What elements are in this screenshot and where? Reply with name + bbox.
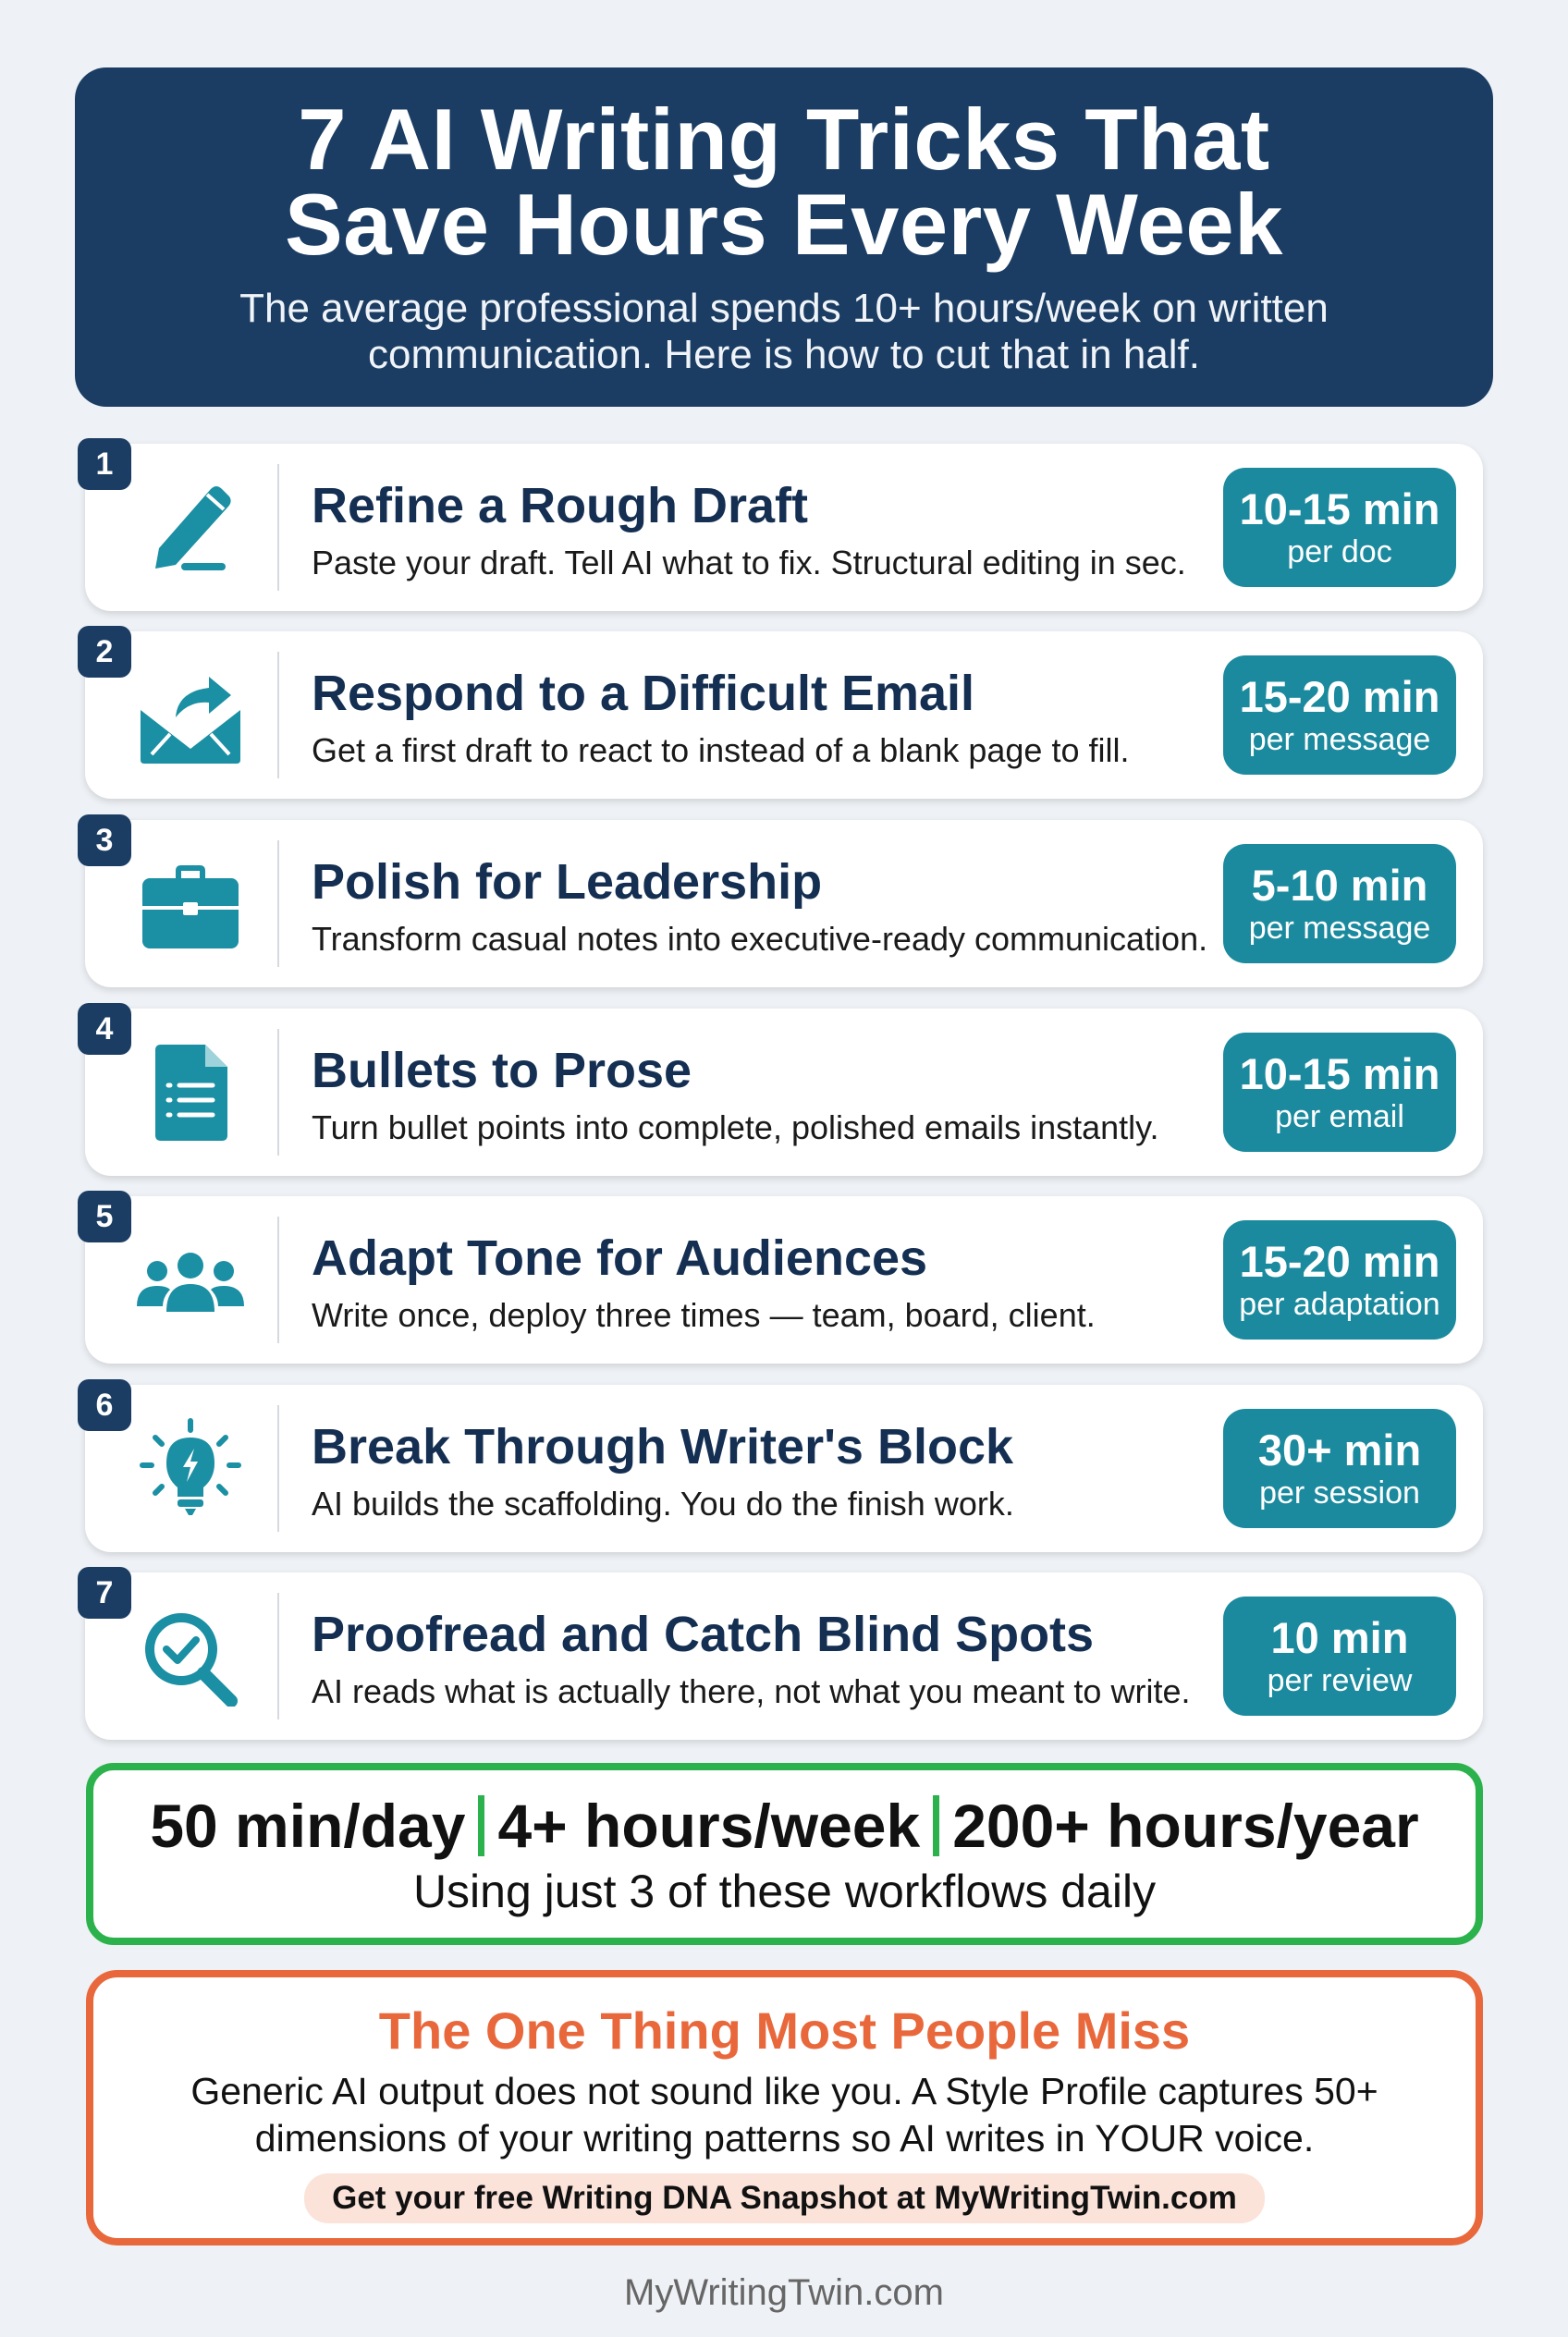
icon: envelope <box>141 677 240 764</box>
pill: time saved <box>1223 1033 1456 1152</box>
callout: one thing people miss: Generic AI output does not sound like you. A Style Profile captures 50+ <box>190 2070 1378 2112</box>
pill: time saved <box>1223 1597 1456 1716</box>
callout: one thing people miss: dimensions of your writing patterns so AI writes in YOUR voice. <box>255 2117 1314 2160</box>
callout: one thing people miss: The One Thing Most People Miss <box>379 2001 1190 2060</box>
pill: time saved <box>1223 655 1456 775</box>
card 2: difficult email: 2 <box>96 634 113 669</box>
icon: lightbulb <box>140 1418 241 1515</box>
card 6: writer's block: 6 <box>96 1388 113 1423</box>
card 5: adapt tone <box>85 1196 1483 1364</box>
pill: time saved: per adaptation <box>1239 1287 1440 1322</box>
icon: people <box>137 1253 244 1312</box>
card 1: refine draft: Paste your draft. Tell AI what to fix. Structural editing in sec. <box>312 544 1186 581</box>
pill: time saved: 15-20 min <box>1240 672 1439 721</box>
card 7: proofread: Proofread and Catch Blind Spots <box>312 1607 1094 1662</box>
pill: time saved: 5-10 min <box>1252 861 1427 910</box>
header: communication. Here is how to cut that in half. <box>368 332 1200 377</box>
pill: time saved: per review <box>1268 1663 1412 1698</box>
stats summary box: 50 min/day 4+ hours/week 200+ hours/year <box>150 1792 1419 1860</box>
header: 7 AI Writing Tricks That <box>298 91 1270 188</box>
icon: briefcase <box>142 865 239 948</box>
card 3: leadership: 3 <box>96 823 113 858</box>
card 2: difficult email: Get a first draft to react to instead of a blank page to fill. <box>312 731 1129 769</box>
pill: time saved <box>1223 1220 1456 1340</box>
icon: pencil <box>155 486 231 570</box>
header <box>75 67 1493 407</box>
pill: time saved: 30+ min <box>1258 1425 1421 1474</box>
card 7: proofread: 7 <box>96 1575 113 1610</box>
header: Save Hours Every Week <box>285 176 1283 273</box>
pill: time saved <box>1223 1409 1456 1528</box>
icon: magnifier check <box>145 1613 238 1707</box>
callout: one thing people miss: Get your free Writing DNA Snapshot at MyWritingTwin.com <box>332 2180 1237 2216</box>
pill: time saved: 10 min <box>1271 1613 1408 1662</box>
card 6: writer's block <box>85 1385 1483 1552</box>
card 3: leadership <box>85 820 1483 987</box>
card 7: proofread: AI reads what is actually there, not what you meant to write. <box>312 1672 1190 1710</box>
card 7: proofread <box>85 1572 1483 1740</box>
pill: time saved: per message <box>1249 722 1430 757</box>
card 1: refine draft: Refine a Rough Draft <box>312 478 808 533</box>
pill: time saved: 10-15 min <box>1240 484 1439 533</box>
pill: time saved <box>1223 468 1456 587</box>
card 4: bullets to prose: Bullets to Prose <box>312 1043 692 1098</box>
callout: one thing people miss <box>86 1970 1483 2245</box>
card 4: bullets to prose <box>85 1009 1483 1176</box>
card 4: bullets to prose: Turn bullet points into complete, polished emails instantly. <box>312 1108 1158 1146</box>
pill: time saved: per session <box>1259 1475 1420 1511</box>
card 2: difficult email <box>85 631 1483 799</box>
card 2: difficult email: Respond to a Difficult Email <box>312 666 974 721</box>
card 1: refine draft: 1 <box>96 447 113 482</box>
card 5: adapt tone: Adapt Tone for Audiences <box>312 1230 927 1286</box>
card 6: writer's block: AI builds the scaffolding. You do the finish work. <box>312 1485 1014 1523</box>
card 5: adapt tone: Write once, deploy three times — team, board, client. <box>312 1296 1096 1334</box>
card 4: bullets to prose: 4 <box>96 1011 113 1046</box>
icon: document <box>155 1045 227 1141</box>
pill: time saved: 15-20 min <box>1240 1237 1439 1286</box>
stats summary box <box>86 1763 1483 1945</box>
pill: time saved: per doc <box>1287 534 1392 569</box>
card 1: refine draft <box>85 444 1483 611</box>
footer: MyWritingTwin.com <box>624 2272 944 2313</box>
pill: time saved: 10-15 min <box>1240 1049 1439 1098</box>
pill: time saved: per email <box>1275 1099 1404 1134</box>
card 5: adapt tone: 5 <box>96 1199 113 1234</box>
pill: time saved: per message <box>1249 911 1430 946</box>
header: The average professional spends 10+ hours/week on written <box>239 286 1329 331</box>
stats summary box: Using just 3 of these workflows daily <box>413 1866 1156 1917</box>
card 6: writer's block: Break Through Writer's Block <box>312 1419 1013 1474</box>
pill: time saved <box>1223 844 1456 963</box>
card 3: leadership: Polish for Leadership <box>312 854 822 910</box>
card 3: leadership: Transform casual notes into executive-ready communication. <box>312 920 1207 958</box>
